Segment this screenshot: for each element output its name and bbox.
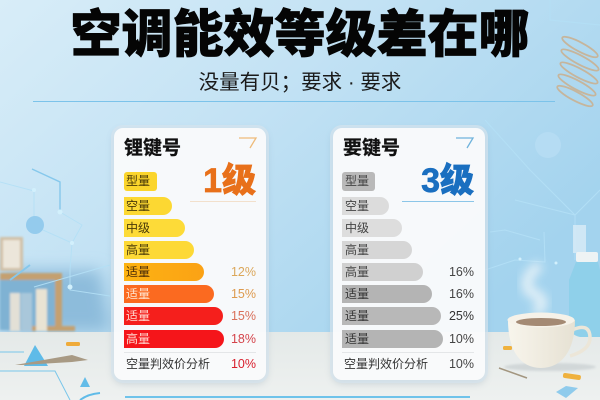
footer row: 10% <box>231 357 256 371</box>
bar: row 7 <box>124 307 223 325</box>
percentages: 10% <box>449 332 474 346</box>
percentages: 15% <box>231 309 256 323</box>
percentages: 16% <box>449 287 474 301</box>
footer row: 10% <box>449 357 474 371</box>
bar: row 2 <box>124 197 172 215</box>
bar: row 8 <box>124 330 224 348</box>
bar: row 6 <box>124 285 214 303</box>
bar: row 1 <box>342 172 375 191</box>
table decor <box>24 345 48 366</box>
bottle <box>569 225 600 337</box>
bar: row 8: 高量 <box>126 332 150 346</box>
bar: row 2: 空量 <box>345 199 369 213</box>
bar: row 4 <box>124 241 194 259</box>
bar: row 1: 型量 <box>126 174 150 188</box>
percentages: 25% <box>449 309 474 323</box>
grade underline <box>402 201 474 202</box>
title: 空调能效等级差在哪 <box>70 6 530 63</box>
bar: row 4: 高量 <box>126 243 150 257</box>
footer row: 空量判效价分析 <box>126 357 210 371</box>
card heading: 要键号 <box>343 138 400 159</box>
percentages: 18% <box>231 332 256 346</box>
footer row <box>124 352 256 377</box>
grade underline <box>190 201 256 202</box>
shelf <box>0 237 75 331</box>
bar: row 7: 适量 <box>345 309 369 323</box>
bar: row 1 <box>124 172 157 191</box>
steam <box>527 265 542 313</box>
bar: row 5 <box>124 263 204 281</box>
bar: row 2 <box>342 197 389 215</box>
percentages: 12% <box>231 265 256 279</box>
bar: row 5: 适量 <box>126 265 150 279</box>
header divider <box>33 101 555 102</box>
bar: row 7 <box>342 307 441 325</box>
percentages: 15% <box>231 287 256 301</box>
bar: row 3 <box>124 219 185 237</box>
bar: row 7: 适量 <box>126 309 150 323</box>
bar: row 6 <box>342 285 432 303</box>
bar: row 3 <box>342 219 402 237</box>
percentages <box>449 265 474 346</box>
bar: row 8 <box>342 330 443 348</box>
icon: corner arrow <box>456 137 474 148</box>
spring <box>555 34 600 109</box>
bar: row 3: 中级 <box>345 221 369 235</box>
network lines <box>0 0 600 296</box>
subtitle: 没量有贝；要求 · 要求 <box>199 71 401 94</box>
percentages: 16% <box>449 265 474 279</box>
grade label: 3级 <box>421 162 474 200</box>
grade label: 1级 <box>203 162 256 200</box>
icon: corner arrow <box>239 137 257 148</box>
coffee cup <box>504 312 596 371</box>
bar: row 2: 空量 <box>126 199 150 213</box>
bar: row 3: 中级 <box>126 221 150 235</box>
bar: row 5 <box>342 263 423 281</box>
percentages <box>231 265 256 346</box>
bar: row 6: 适量 <box>126 287 150 301</box>
bar: row 1: 型量 <box>345 174 369 188</box>
bar: row 4: 高量 <box>345 243 369 257</box>
panel: left card, grade 1 <box>114 128 266 380</box>
bar: row 5: 高量 <box>345 265 369 279</box>
panel: right card, grade 3 <box>333 128 485 380</box>
footer row: 空量判效价分析 <box>344 357 428 371</box>
bar: row 8: 适量 <box>345 332 369 346</box>
footer row <box>342 352 474 377</box>
bar: row 6: 适量 <box>345 287 369 301</box>
bar: row 4 <box>342 241 412 259</box>
card heading: 锂键号 <box>124 138 181 159</box>
